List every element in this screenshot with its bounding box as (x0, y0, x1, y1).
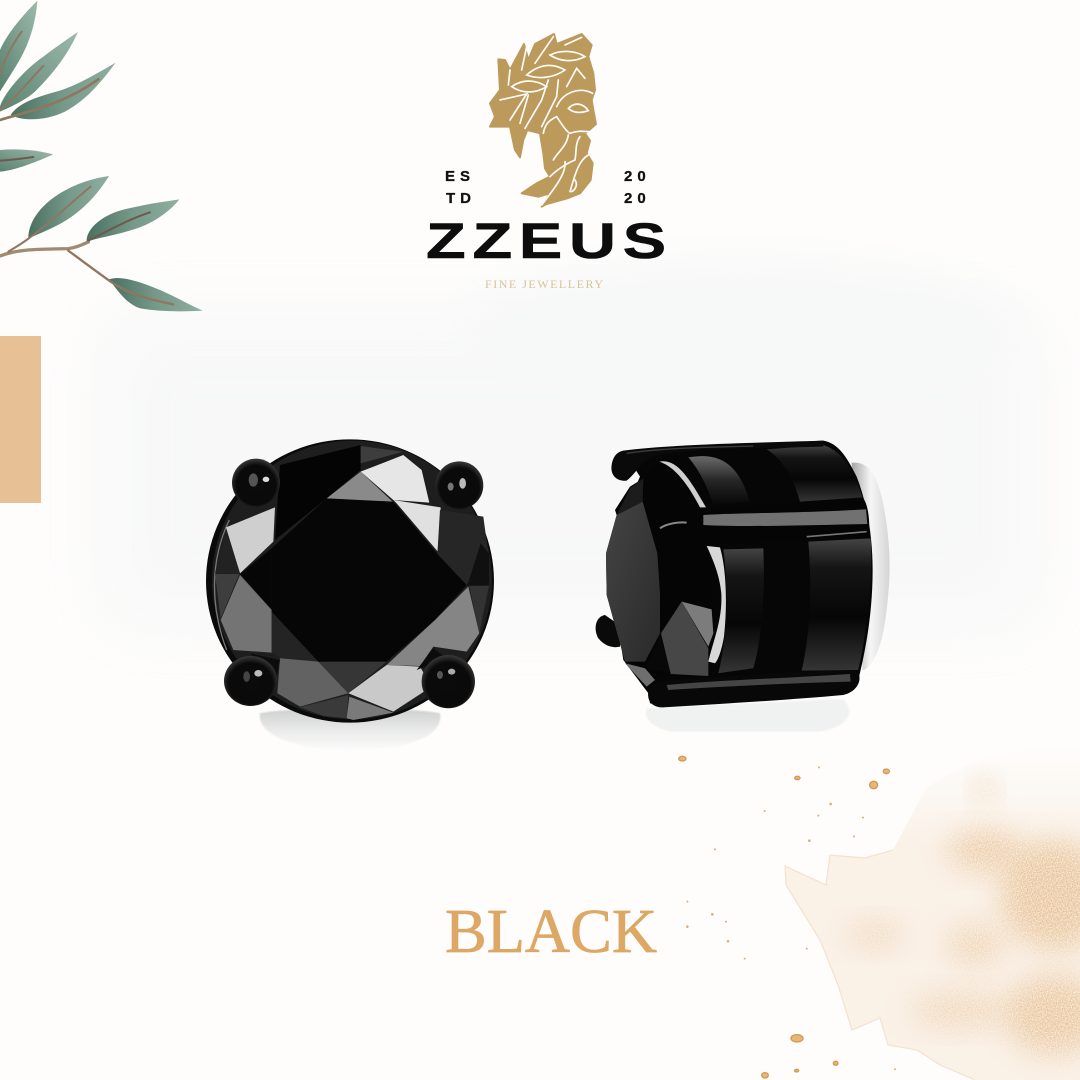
soft grey watercolour cloud (100, 260, 1040, 630)
established text (445, 168, 651, 207)
diamond facets (215, 445, 489, 720)
tan accent bar (0, 336, 41, 503)
established text: ES (445, 168, 475, 185)
prong: middle (656, 498, 869, 545)
prong: bottom right (417, 648, 475, 708)
paint splatter dots (679, 756, 896, 1078)
branch and veins (0, 32, 173, 304)
brand name: ZZEUS (426, 214, 673, 269)
prong tip: back (596, 615, 622, 647)
colour name label: BLACK (445, 898, 657, 966)
leaf 1 (0, 1, 37, 92)
inner rim highlight (214, 520, 229, 650)
prong: bottom left (224, 653, 280, 706)
prong: bottom (648, 670, 860, 707)
watercolour splash: bottom right (785, 745, 1080, 1080)
brand logo (426, 34, 673, 291)
earring: front view (206, 439, 494, 750)
silver backing disc (852, 463, 890, 671)
black cylinder body (607, 441, 873, 707)
leaf 7 (109, 278, 203, 311)
reflection shadow (260, 708, 440, 750)
leaf branch illustration (0, 1, 203, 311)
leaf 6 (87, 199, 179, 242)
body highlight bands (688, 445, 871, 673)
silver bezel edges (659, 461, 726, 663)
leaf 4 (0, 149, 53, 172)
setting rim (206, 439, 494, 723)
icon: Zeus head with laurel wreath (490, 34, 596, 207)
leaf 3 (11, 63, 116, 119)
earring: side view (596, 441, 890, 732)
prong: top (611, 441, 823, 481)
prong: top left (232, 459, 280, 507)
leaf 5 (28, 176, 109, 238)
established text: 20 (624, 168, 651, 185)
leaf 2 (0, 32, 78, 112)
prong: top right (435, 461, 483, 509)
established text: 20 (624, 190, 651, 207)
tagline: FINE JEWELLERY (485, 277, 603, 291)
established text: TD (446, 190, 476, 207)
gem facets (606, 462, 713, 687)
reflection shadow (646, 699, 849, 732)
